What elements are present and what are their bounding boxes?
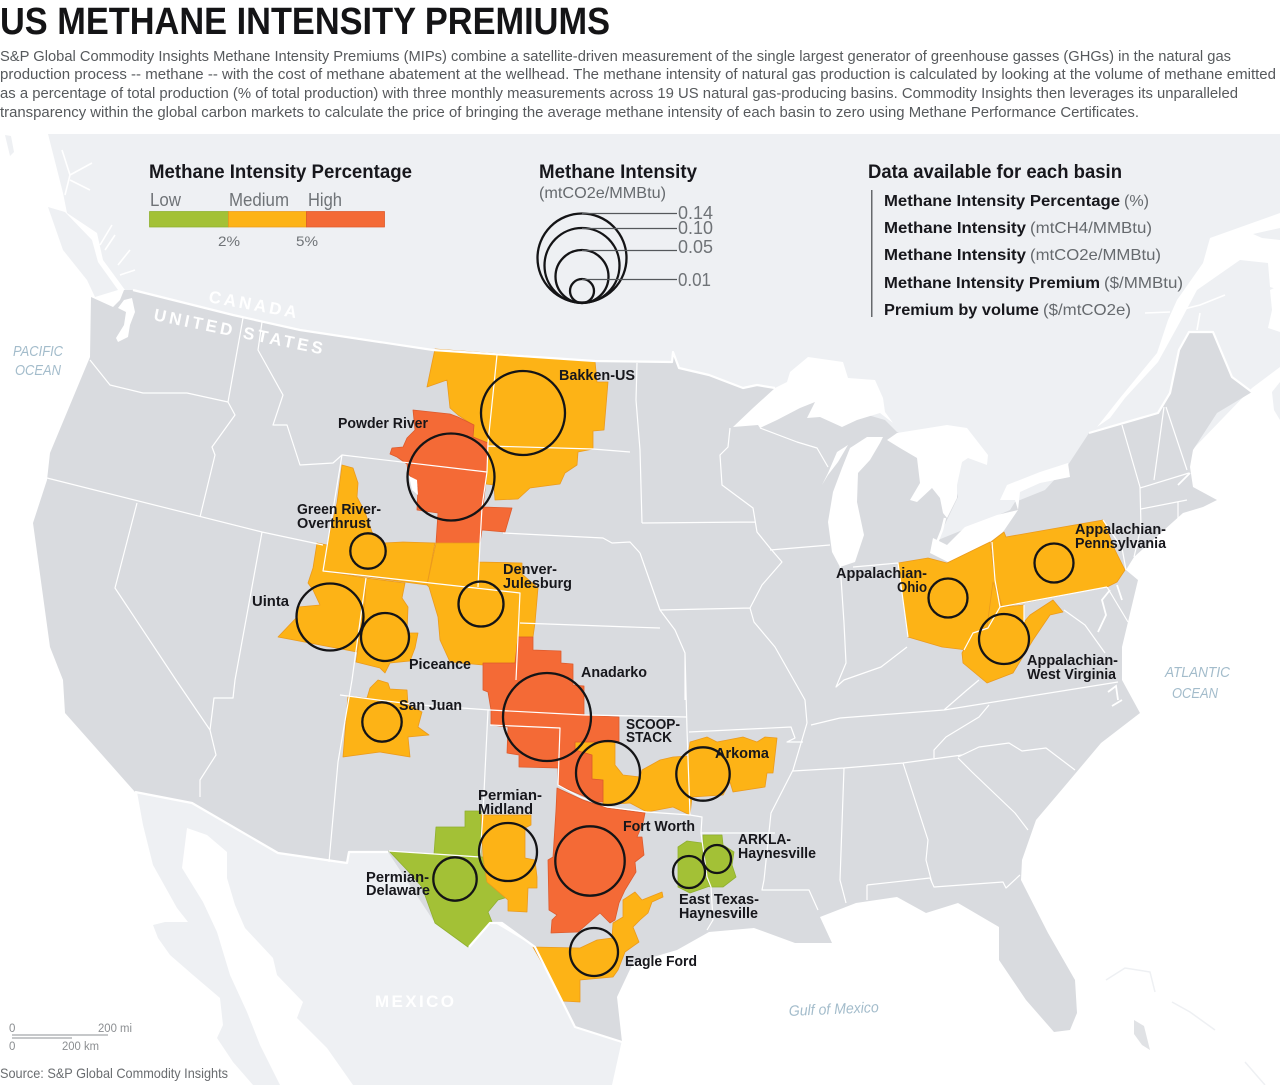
Detroit river [936,518,945,545]
Anticosti Island [1253,228,1280,240]
basin labels: Eagle Ford [625,954,697,970]
ocean and country labels: ATLANTIC [1164,664,1230,681]
ocean and country labels: Gulf of Mexico [788,999,879,1020]
basin labels [252,368,1167,970]
basin labels: Julesburg [503,576,572,592]
description paragraph: as a percentage of total production (% of total production) with three monthly measurements across 19 US natural gas-producing basins. Commodity Insights then leverages its unparalleled [0,86,1238,102]
Bahamas [1134,1020,1150,1050]
basin: Permian-Midland [481,815,537,912]
ocean and country labels [13,287,1230,1020]
basin labels: Haynesville [679,906,758,922]
scale bar: 0 [9,1023,15,1035]
basin labels: San Juan [399,698,462,714]
basin labels: Permian- [366,870,429,886]
St Lawrence river and gulf [1097,213,1280,427]
basin labels: Piceance [409,657,471,673]
description paragraph [0,49,1276,121]
basin labels: Haynesville [738,846,816,862]
legend: data available for each basin: Methane Intensity [884,220,1026,237]
basin labels: STACK [626,730,672,746]
legend: methane intensity circles: 0.01 [678,270,711,290]
legend: methane intensity percentage: 5% [296,233,318,249]
legend: methane intensity circles [538,162,713,303]
United States landmass [33,290,1252,1042]
Lake Huron [887,425,988,518]
basin labels: ARKLA- [738,832,791,848]
state boundaries [47,318,1189,930]
legend: methane intensity percentage: 2% [218,233,240,249]
Canada landmass [48,134,1280,545]
basin: Uinta [278,543,366,652]
basin labels: Arkoma [715,746,770,762]
basin: San Juan [343,680,429,757]
legend: data available for each basin: (mtCO2e/MMBtu) [1030,247,1161,264]
legend: data available for each basin: Methane Intensity Percentage [884,193,1120,210]
ocean and country labels: CANADA [207,287,301,323]
ocean and country labels: OCEAN [1172,685,1218,702]
legend: methane intensity percentage [149,162,412,249]
legend: data available for each basin: (%) [1124,193,1149,210]
legend: methane intensity circles: Methane Intensity [539,162,697,183]
legend: methane intensity circles: 0.10 [678,218,713,238]
basin labels: Appalachian- [836,566,927,582]
legend: data available for each basin: Data available for each basin [868,162,1122,183]
basin labels: Delaware [366,883,430,899]
basin labels: Denver- [503,562,557,578]
coastal bays [1098,473,1190,706]
Mexico [137,792,622,1085]
basin labels: Fort Worth [623,819,695,835]
legend: data available for each basin: (mtCH4/MMBtu) [1030,220,1152,237]
scale bar: 200 km [62,1041,99,1053]
legend: methane intensity circles: 0.05 [678,237,713,257]
basin labels: East Texas- [679,892,759,908]
basin labels: SCOOP- [626,717,680,733]
basin labels: Appalachian- [1075,522,1166,538]
white patch in Powder River [409,476,418,495]
BC coastal inlets [62,150,1225,330]
ocean and country labels: OCEAN [15,362,61,379]
ocean and country labels: MEXICO [375,992,457,1011]
legend: methane intensity percentage: High [308,190,342,210]
Nova Scotia [1272,382,1280,420]
basin: Appalachian-Pennsylvania [991,520,1125,607]
legend: data available for each basin: ($/mtCO2e) [1043,302,1131,319]
basin: Arkoma and SCOOP-STACK [575,737,777,815]
legend: methane intensity percentage: Medium [229,190,289,210]
Puget Sound [116,298,135,342]
basin labels: Permian- [478,788,542,804]
description paragraph: S&P Global Commodity Insights Methane Intensity Premiums (MIPs) combine a satellite-driven measurement of the single largest generator of greenhouse gasses (GHGs) in the natural gas [0,49,1231,65]
basin: East Texas-Haynesville [678,841,710,893]
Green Bay [822,445,848,485]
international border [133,290,1252,1042]
description paragraph: production process -- methane -- with the cost of methane abatement at the wellhead. The methane intensity of natural gas production is calculated by looking at the volume of methane emitted [0,67,1276,83]
basin labels: Bakken-US [559,368,635,384]
basin labels: Appalachian- [1027,653,1118,669]
Haida Gwaii [5,135,14,156]
scale bar: 200 mi [98,1023,132,1035]
scale bar: 0 [9,1041,15,1053]
legend: methane intensity circles: 0.14 [678,203,713,223]
Lake Michigan [828,437,883,567]
basin labels: Powder River [338,416,428,432]
Lake Superior [733,357,893,428]
basin: ARKLA-Haynesville [703,835,736,887]
Lake Ontario [1000,463,1070,510]
basin: Piceance [356,578,418,673]
basin labels: Pennsylvania [1075,536,1167,552]
basin labels: West Virginia [1027,667,1117,683]
legend: methane intensity percentage: Low [150,190,182,210]
legend: data available for each basin [868,162,1183,319]
basins [278,349,1125,1002]
description paragraph: transparency within the global carbon markets to calculate the price of bringing the average methane intensity of each basin to zero using Methane Performance Certificates. [0,105,1139,121]
Lake Erie [930,510,1018,563]
ocean and country labels: UNITED STATES [152,305,327,359]
basin labels: Midland [478,802,533,818]
legend: methane intensity percentage: Methane Intensity Percentage [149,162,412,183]
basin labels: Overthrust [297,516,371,532]
basin labels: Green River- [297,502,381,518]
basin circles [296,371,1074,976]
basin: Appalachian-West Virginia [962,582,1063,683]
legend: data available for each basin: Premium by volume [884,302,1039,319]
legend: data available for each basin: Methane Intensity Premium [884,275,1100,292]
basin: Permian-Delaware [389,811,508,947]
basin: Appalachian-Ohio [898,542,1000,650]
basin: Denver-Julesburg [427,543,538,665]
basin: Green River-Overthrust [323,465,435,585]
basin: Fort Worth [548,788,645,933]
legend: data available for each basin: Methane Intensity [884,247,1026,264]
basin labels: Uinta [252,594,290,610]
legend: methane intensity circles: (mtCO2e/MMBtu) [539,185,666,202]
basin labels: Anadarko [581,665,647,681]
Vancouver Island [48,207,118,297]
ocean and country labels: PACIFIC [13,343,63,360]
title: US METHANE INTENSITY PREMIUMS [0,1,610,43]
basin: Anadarko [483,637,619,802]
basin: Eagle Ford [533,892,663,1002]
scale bar [9,1023,132,1053]
legend: data available for each basin: ($/MMBtu) [1104,275,1183,292]
basin: Powder River [390,410,512,549]
basin: Bakken-US [427,349,608,500]
basin labels: Ohio [897,580,927,596]
source note: Source: S&P Global Commodity Insights [0,1065,228,1081]
